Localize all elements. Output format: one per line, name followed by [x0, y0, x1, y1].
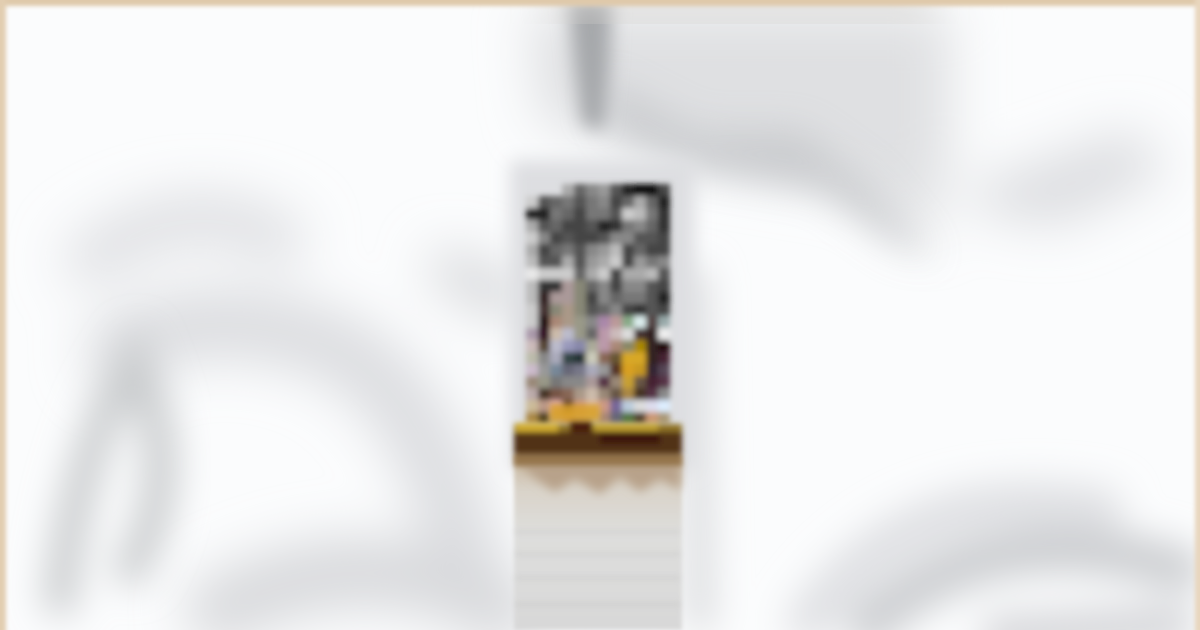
soft halo behind ash — [510, 160, 695, 470]
ember and burn line — [514, 404, 682, 466]
smoke: left dark loop — [60, 360, 161, 600]
smoke: top wedge darker band — [600, 80, 935, 260]
smoke: top stem core — [568, 0, 612, 130]
smoke: left plumes — [90, 219, 510, 610]
burn fade below the burn line — [516, 462, 680, 494]
smoke: top mass and wedge — [530, 10, 1170, 240]
ash mosaic — [526, 184, 670, 424]
cigarette body — [514, 455, 682, 630]
smoke: right of cigarette and bottom right — [695, 280, 1180, 630]
smoke: top edge — [550, 0, 930, 16]
